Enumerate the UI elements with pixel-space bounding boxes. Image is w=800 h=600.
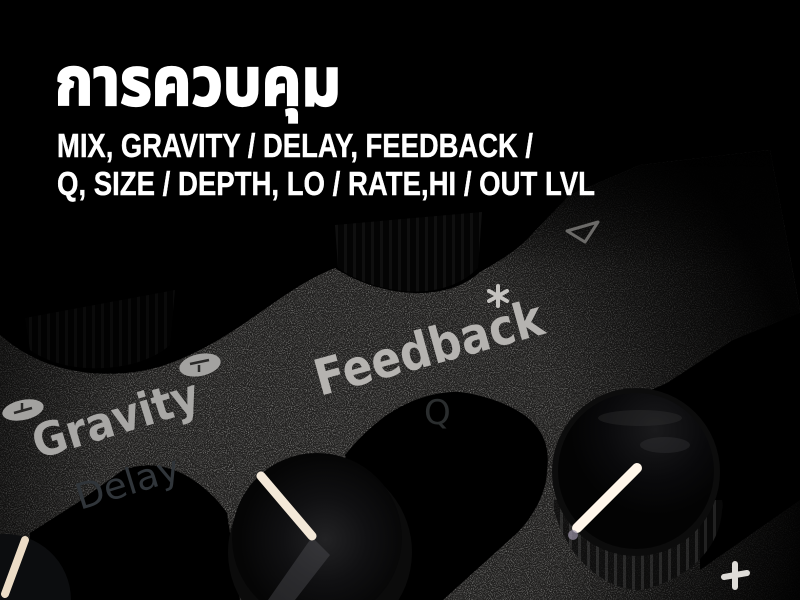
indicator: right knob xyxy=(577,468,637,528)
indicator: center knob xyxy=(261,476,312,536)
knob: center xyxy=(228,453,412,600)
icon: gravity symbol right xyxy=(177,350,223,380)
icon: feedback asterisk xyxy=(489,286,507,306)
label: Q: Q xyxy=(424,393,451,433)
indicator: left knob xyxy=(5,540,25,594)
label: Delay: Delay xyxy=(71,448,185,519)
shadow: delay knob xyxy=(30,465,240,600)
knob skirt: upper middle xyxy=(335,212,482,292)
icon: plus xyxy=(724,564,747,587)
title: การควบคุม xyxy=(55,44,341,123)
knob skirt: upper left xyxy=(25,290,175,368)
subtitle: line 2: Q, SIZE / DEPTH, LO / RATE,HI / OUT LVL xyxy=(57,165,595,202)
panel: textured pedal surface xyxy=(0,150,800,600)
icon: gravity symbol left xyxy=(0,396,46,424)
knob: right xyxy=(552,388,722,590)
label: Gravity: Gravity xyxy=(25,368,206,470)
icon: triangle xyxy=(567,222,598,242)
knob: left xyxy=(0,534,71,600)
subtitle: line 1: MIX, GRAVITY / DELAY, FEEDBACK / xyxy=(57,127,533,164)
shadow: right knob xyxy=(640,313,800,570)
label: Feedback: Feedback xyxy=(308,288,551,408)
shadow: q knob xyxy=(345,392,548,600)
